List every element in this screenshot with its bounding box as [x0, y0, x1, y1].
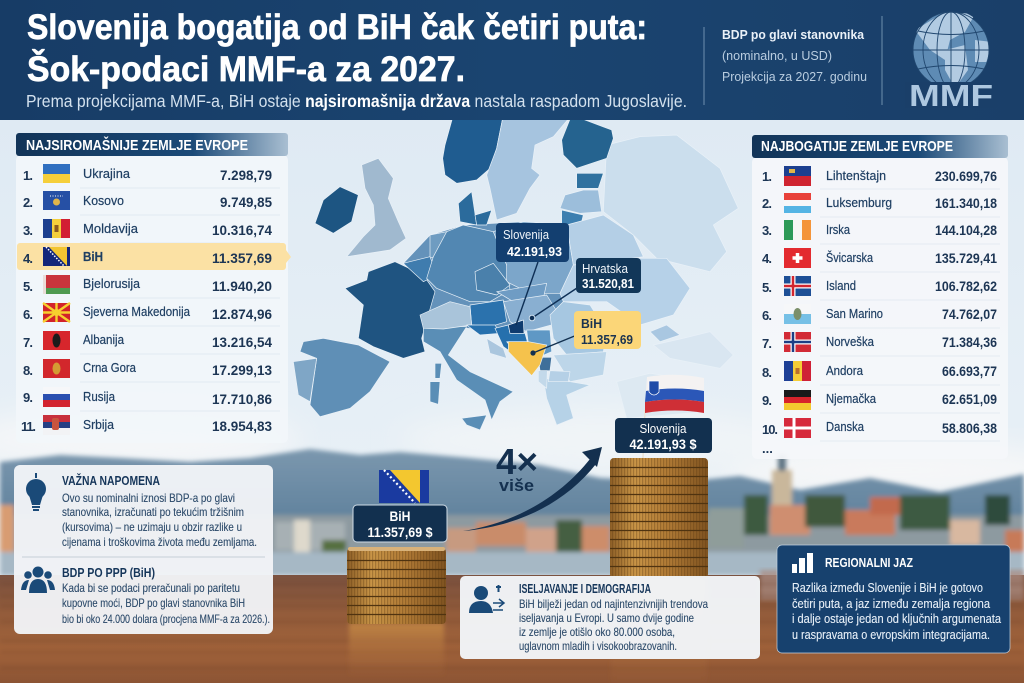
coin stack: Slovenija [610, 458, 708, 683]
flag: Moldavija [43, 219, 70, 238]
callout: Hrvatska on map: Hrvatska [582, 262, 628, 276]
heading: richest countries [752, 135, 1008, 158]
highlight: BiH row [17, 243, 291, 270]
text: emigration: uglavnom mladih i visokoobrazovanih. [519, 639, 677, 653]
row 1: Ukrajina: 1. [23, 168, 33, 183]
row 3: Moldavija: 10.316,74 [212, 222, 272, 238]
callout: Hrvatska on map [529, 258, 641, 321]
row 7: Albanija: 13.216,54 [212, 334, 272, 350]
flag: Njemačka [784, 390, 811, 410]
label: Slovenija value: Slovenija [640, 421, 687, 436]
indicator description: Projekcija za 2027. godinu [722, 69, 867, 84]
row 3: Moldavija [23, 219, 272, 238]
map of Europe with GDP shading [293, 115, 738, 430]
callout: Hrvatska on map: 31.520,81 [582, 276, 634, 291]
row 10: Danska: 58.806,38 [942, 420, 997, 436]
row 8: Crna Gora: 17.299,13 [212, 362, 272, 378]
label: Slovenija value [615, 418, 712, 453]
row 7: Albanija: 7. [23, 335, 33, 350]
flag: BiH on stack [379, 470, 429, 503]
text: regional gap: i dalje ostaje jedan od ključnih argumenata [792, 612, 1001, 626]
row 6: Sjeverna Makedonija: 6. [23, 307, 33, 322]
text: emigration: iz zemlje je otišlo oko 80.000 osoba, [519, 625, 675, 639]
row 1: Lihtenštajn: 230.699,76 [935, 168, 997, 184]
row 8: Andora: Andora [826, 363, 864, 378]
icon: person leaving [469, 585, 504, 613]
text: regional gap: REGIONALNI JAZ [825, 555, 913, 570]
arrow: growth from BiH to Slovenia [463, 447, 602, 531]
row 2: Luksemburg: 161.340,18 [935, 195, 997, 211]
text: emigration: BiH bilježi jedan od najintenzivnijih trendova [519, 597, 708, 611]
note: GDP by PPP: BDP PO PPP (BiH) [62, 566, 155, 580]
row 8: Andora: 8. [762, 365, 772, 380]
heading: richest countries: NAJBOGATIJE ZEMLJE EVROPE [761, 138, 953, 155]
icon: bar chart [792, 553, 813, 573]
callout: BiH on map [530, 311, 641, 356]
flag: Lihtenštajn [784, 166, 811, 186]
title: Slovenija bogatija od BiH čak četiri puta: [27, 8, 647, 47]
row 1: Lihtenštajn: Lihtenštajn [826, 168, 886, 183]
row 11: Srbija: Srbija [83, 417, 115, 432]
row 3: Irska: Irska [826, 222, 851, 237]
row 4: BiH: BiH [83, 249, 103, 264]
row 9: Rusija [23, 387, 272, 407]
row 3: Moldavija: Moldavija [83, 221, 139, 236]
callout: Slovenija on map [496, 223, 569, 325]
row 4: Švicarska: Švicarska [826, 250, 874, 265]
row 5: Bjelorusija: 5. [23, 279, 33, 294]
flag: Švicarska [784, 248, 811, 268]
row 7: Albanija [23, 331, 272, 350]
row 9: Njemačka: 9. [762, 393, 772, 408]
flag: Ukrajina [43, 164, 70, 183]
callout: Slovenija on map: Slovenija [503, 228, 549, 242]
header band [0, 0, 1024, 120]
flag: Srbija [43, 415, 70, 435]
flag: Crna Gora [43, 359, 70, 378]
callout: Slovenija on map: 42.191,93 [507, 244, 562, 259]
row 6: Sjeverna Makedonija [23, 303, 272, 322]
row 6: San Marino: San Marino [826, 306, 883, 321]
row 6: San Marino: 6. [762, 308, 772, 323]
row 7: Norveška: 7. [762, 336, 772, 351]
text: regional gap [792, 555, 1001, 642]
label: Slovenija value: 42.191,93 $ [630, 436, 697, 452]
row 2: Kosovo: 2. [23, 195, 33, 210]
panel: poorest countries table [16, 133, 291, 443]
flag: Irska [784, 220, 811, 240]
row 9: Rusija: 17.710,86 [212, 391, 272, 407]
icon: people [21, 566, 55, 593]
row 3: Irska: 3. [762, 223, 772, 238]
row 4: Švicarska: 4. [762, 251, 772, 266]
text: regional gap: Razlika između Slovenije i BiH je gotovo [792, 581, 983, 595]
highlighted country: Slovenija [508, 320, 524, 333]
label: BiH value: 11.357,69 $ [368, 524, 433, 540]
flag: Norveška [784, 332, 811, 352]
note: important note: cijenama i troškovima života među zemljama. [62, 535, 257, 549]
row 11: Srbija: 18.954,83 [212, 418, 272, 434]
flag: Rusija [43, 387, 70, 407]
flag: Bjelorusija [43, 275, 70, 294]
row 4: Švicarska [762, 248, 997, 268]
row 8: Crna Gora: 8. [23, 363, 33, 378]
text: regional gap: u raspravama o evropskim integracijama. [792, 628, 990, 642]
flag: San Marino [784, 304, 811, 324]
icon: light bulb [26, 473, 46, 511]
row 5: Island: 106.782,62 [935, 278, 997, 294]
row 5: Island [762, 276, 997, 296]
row 1: Lihtenštajn [762, 166, 997, 186]
row 7: Norveška: Norveška [826, 334, 875, 349]
row 1: Ukrajina [23, 164, 272, 183]
row 10: Danska: Danska [826, 419, 865, 434]
row 9: Rusija: 9. [23, 390, 33, 405]
row 2: Luksemburg [762, 193, 997, 213]
row 5: Bjelorusija: Bjelorusija [83, 276, 141, 291]
row 8: Andora: 66.693,77 [942, 363, 997, 379]
text: emigration: iseljavanja u Evropi. U samo dvije godine [519, 611, 694, 625]
row 7: Albanija: Albanija [83, 332, 125, 347]
multiplier: 4x more: više [499, 476, 534, 495]
title [27, 8, 647, 89]
text: emigration: ISELJAVANJE I DEMOGRAFIJA [519, 582, 651, 596]
row 5: Island: 5. [762, 280, 772, 295]
icon: MMF globe logo: MMF [909, 78, 993, 113]
panel: emigration and demographics [460, 576, 760, 659]
row 10: Danska [762, 418, 997, 438]
coin stack: BiH [347, 547, 446, 675]
flag: BiH [43, 247, 70, 266]
row 6: Sjeverna Makedonija: Sjeverna Makedonija [83, 304, 191, 319]
note: important note: (kursovima) – ne uzimaju u obzir razlike u [62, 520, 242, 534]
callout: BiH on map: BiH [581, 316, 602, 331]
row 9: Rusija: Rusija [83, 389, 116, 404]
flag: Slovenija on stack [643, 375, 704, 458]
row 7: Norveška: 71.384,36 [942, 334, 997, 350]
label: BiH value [353, 505, 447, 542]
row 2: Kosovo [23, 191, 272, 210]
row 8: Andora [762, 361, 997, 381]
row 4: Švicarska: 135.729,41 [935, 250, 997, 266]
text: emigration [519, 582, 708, 653]
note: important note: VAŽNA NAPOMENA [62, 473, 160, 488]
panel: notes [14, 465, 273, 634]
panel: richest countries table: ... [762, 441, 773, 456]
row 1: Lihtenštajn: 1. [762, 169, 772, 184]
highlighted country: BiH [508, 342, 547, 376]
row 5: Bjelorusija: 11.940,20 [212, 278, 272, 294]
row 1: Ukrajina: 7.298,79 [220, 167, 272, 183]
row 5: Island: Island [826, 278, 856, 293]
title: Šok-podaci MMF-a za 2027. [27, 49, 465, 89]
indicator description [722, 27, 867, 84]
row 4: BiH: 11.357,69 [212, 250, 272, 266]
row 6: Sjeverna Makedonija: 12.874,96 [212, 306, 272, 322]
note: important note: Ovo su nominalni iznosi BDP-a po glavi [62, 491, 235, 505]
icon: MMF globe logo [911, 12, 992, 106]
row 4: BiH: 4. [23, 251, 33, 266]
flag: Kosovo [43, 191, 70, 210]
row 3: Irska: 144.104,28 [935, 222, 997, 238]
indicator description: (nominalno, u USD) [722, 48, 832, 63]
row 9: Njemačka [762, 390, 997, 410]
row 6: San Marino [762, 304, 997, 324]
panel: richest countries table [752, 135, 1008, 459]
row 1: Ukrajina: Ukrajina [83, 166, 131, 181]
indicator description: BDP po glavi stanovnika [722, 27, 865, 42]
subtitle: Prema projekcijama MMF-a, BiH ostaje najsiromašnija država nastala raspadom Jugoslavije. [26, 91, 687, 111]
row 11: Srbija: 11. [21, 419, 36, 434]
row 3: Moldavija: 3. [23, 223, 33, 238]
note: GDP by PPP [62, 566, 270, 626]
row 9: Njemačka: Njemačka [826, 391, 877, 406]
flag: Luksemburg [784, 193, 811, 213]
row 5: Bjelorusija [23, 275, 272, 294]
note: GDP by PPP: bio bi oko 24.000 dolara (procjena MMF-a za 2026.). [62, 612, 270, 626]
note: GDP by PPP: kupovne moći, BDP po glavi stanovnika BiH [62, 596, 245, 610]
row 8: Crna Gora: Crna Gora [83, 360, 137, 375]
callout: BiH on map: 11.357,69 [581, 332, 633, 347]
flag: Island [784, 276, 811, 296]
row 2: Kosovo: 9.749,85 [220, 194, 272, 210]
row 11: Srbija [21, 415, 272, 435]
note: GDP by PPP: Kada bi se podaci preračunali po paritetu [62, 581, 240, 595]
row 4: BiH [23, 247, 272, 266]
flag: Sjeverna Makedonija [43, 303, 70, 322]
row 9: Njemačka: 62.651,09 [942, 391, 997, 407]
note: important note: stanovnika, izračunati po tekućim tržišnim [62, 505, 244, 519]
multiplier: 4x more: 4× [496, 441, 538, 482]
heading: poorest countries: NAJSIROMAŠNIJE ZEMLJE EVROPE [26, 136, 248, 154]
panel: regional gap [777, 545, 1010, 653]
row 2: Luksemburg: Luksemburg [826, 195, 892, 210]
row 10: Danska: 10. [762, 422, 778, 437]
label: BiH value: BiH [390, 508, 410, 524]
text: regional gap: četiri puta, a jaz između zemalja regiona [792, 597, 990, 611]
note: important note [62, 473, 257, 549]
flag: Albanija [43, 331, 70, 350]
flag: Danska [784, 418, 811, 438]
row 7: Norveška [762, 332, 997, 352]
row 6: San Marino: 74.762,07 [942, 306, 997, 322]
row 2: Kosovo: Kosovo [83, 193, 124, 208]
row 8: Crna Gora [23, 359, 272, 378]
row 2: Luksemburg: 2. [762, 196, 772, 211]
row 3: Irska [762, 220, 997, 240]
flag: Andora [784, 361, 811, 381]
